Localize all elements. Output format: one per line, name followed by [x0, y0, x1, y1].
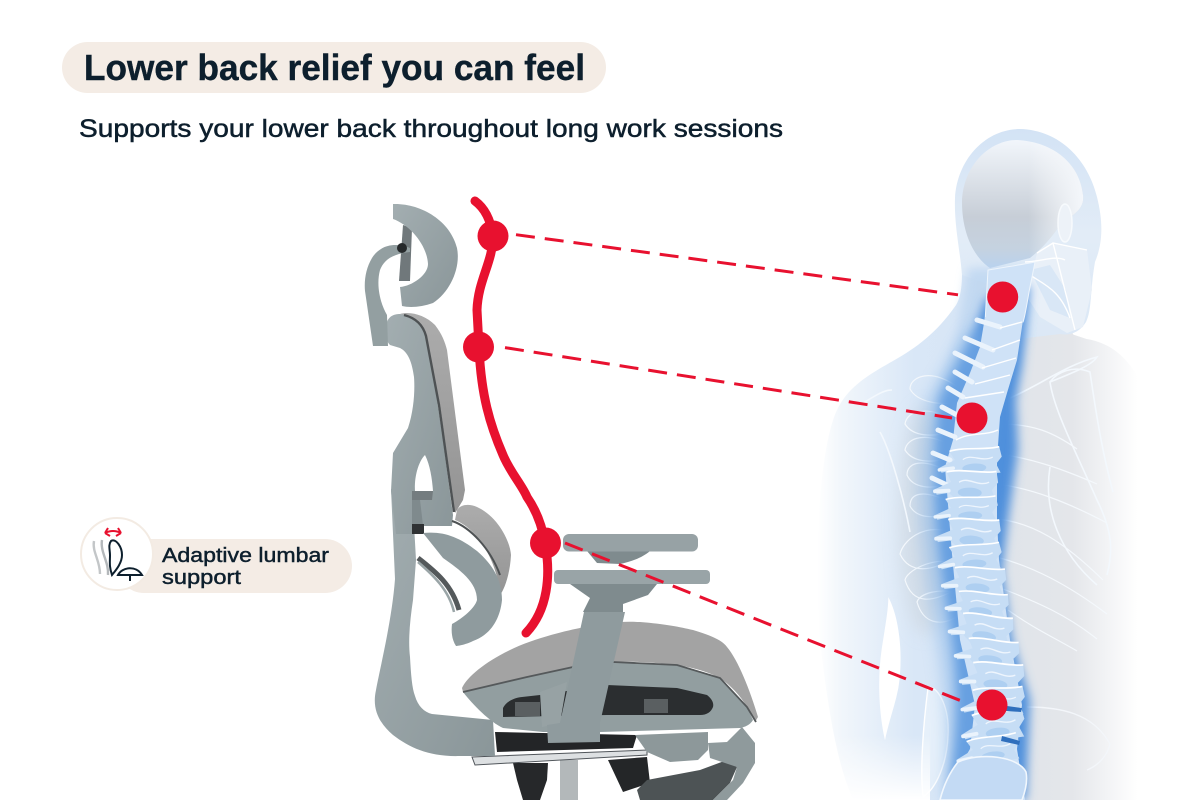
callout: adaptive lumbar support: support — [162, 567, 242, 589]
thoracic spinous processes — [932, 320, 1000, 485]
spine glow — [934, 285, 1030, 800]
seat cushion — [462, 622, 758, 722]
back hinge — [412, 491, 433, 534]
jaw and ear — [1025, 204, 1092, 333]
neck blue — [935, 268, 1030, 420]
title: Lower back relief you can feel — [84, 47, 585, 88]
headrest — [365, 204, 458, 346]
hand bones — [922, 688, 948, 797]
chair marker dots — [463, 220, 561, 558]
back mesh — [400, 313, 465, 513]
seat bracket — [540, 682, 567, 727]
shoulder bones — [860, 357, 1113, 585]
slide rail — [472, 750, 647, 765]
dashed connector: lower back — [565, 543, 964, 702]
office chair side view — [365, 204, 758, 800]
seat mechanism — [495, 732, 637, 752]
seat vent — [503, 685, 713, 717]
armrests — [554, 534, 710, 612]
spine marker dots — [956, 282, 1018, 720]
dashed connector: neck — [516, 235, 958, 295]
neck vertebrae — [985, 262, 1035, 322]
seat side frame — [463, 662, 753, 732]
bottom fade — [820, 735, 930, 800]
dashed connector: upper back — [505, 348, 952, 418]
lumbar support — [418, 505, 511, 646]
sacrum — [940, 757, 1027, 800]
soft left glow — [920, 330, 1000, 800]
anatomy: translucent back and spine — [817, 129, 1162, 800]
chair column and base — [513, 757, 650, 800]
icon: reclining chair — [81, 518, 153, 590]
armrest post — [547, 612, 625, 743]
footrest — [635, 727, 755, 800]
icon: adjustment arrow — [105, 528, 121, 536]
callout: adaptive lumbar support: Adaptive lumbar — [162, 545, 329, 567]
red spinal curve on chair — [475, 201, 548, 633]
callout: adaptive lumbar support — [81, 518, 352, 593]
skull dome — [962, 140, 1083, 268]
gap between arm and waist — [879, 597, 901, 740]
ribs — [900, 376, 1107, 651]
upper back frame — [385, 314, 453, 534]
vertebral column — [932, 317, 1026, 800]
frame opening — [415, 455, 433, 491]
left ribcage shade — [899, 405, 951, 635]
subtitle: Supports your lower back throughout long work sessions — [79, 115, 783, 143]
pelvis outline — [1027, 707, 1110, 770]
lower frame — [375, 489, 495, 756]
torso silhouette — [817, 259, 1162, 800]
head outline — [955, 129, 1101, 340]
